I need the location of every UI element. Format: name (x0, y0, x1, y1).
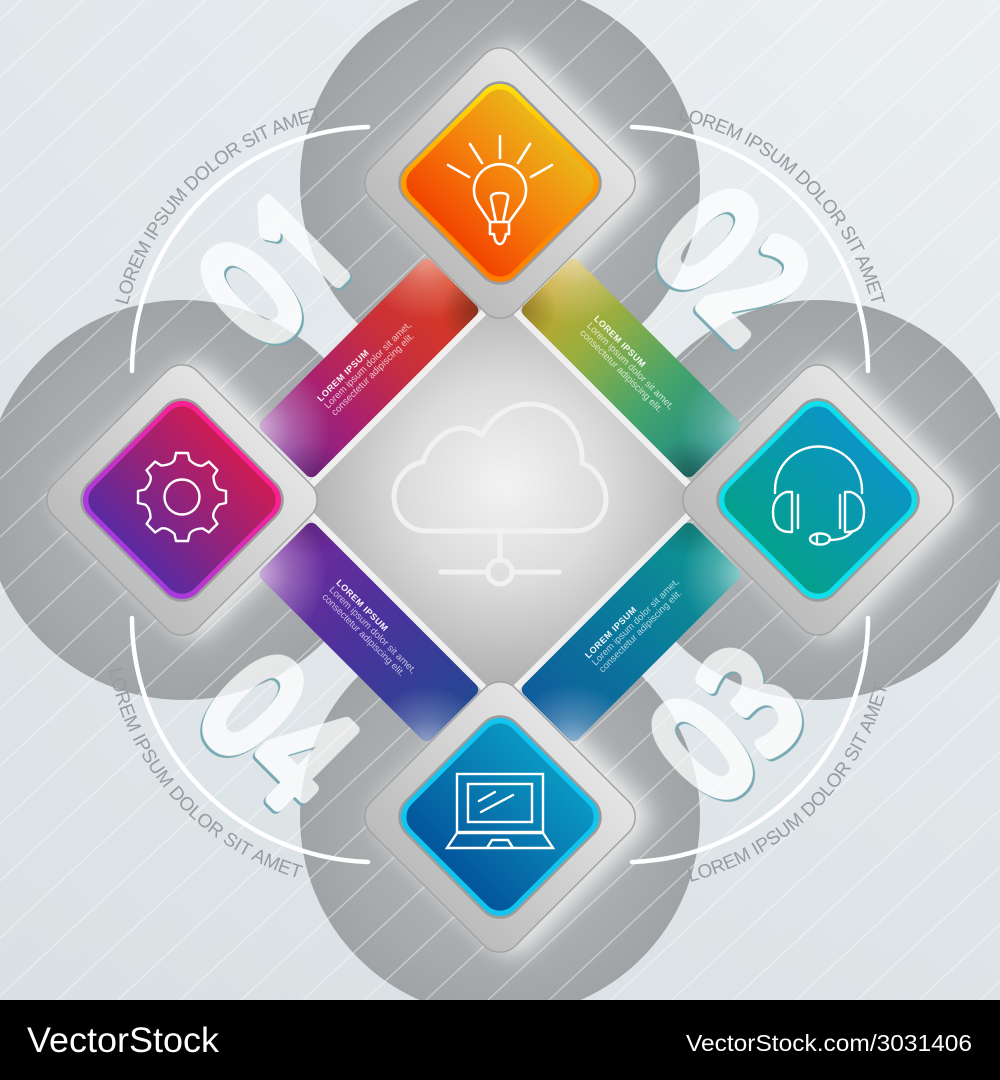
curved captions: LOREM IPSUM DOLOR SIT AMET (115, 107, 320, 304)
ribbon text: Lorem ipsum dolor sit amet, (327, 585, 418, 676)
panel: top tile (356, 39, 644, 327)
panel: ribbon green (522, 258, 740, 478)
ribbon text: LOREM IPSUM (334, 578, 390, 633)
footer url: VectorStock.com/3031406 (686, 1030, 972, 1056)
ribbon text: consectetur adipiscing elit. (320, 592, 407, 679)
icon: laptop (447, 774, 553, 848)
panel: left tile (38, 356, 326, 644)
icon: headset (773, 446, 864, 544)
tile glows (47, 36, 977, 964)
ribbon text: consectetur adipiscing elit. (329, 331, 417, 418)
icon: gear (132, 447, 232, 547)
icon: cloud network (394, 404, 606, 584)
footer bar (0, 1000, 1000, 1080)
ribbon text: LOREM IPSUM (315, 347, 371, 403)
panel: ribbon blue (260, 522, 478, 742)
ribbon text: Lorem ipsum dolor sit amet, (584, 321, 676, 412)
curved captions: LOREM IPSUM DOLOR SIT AMET (110, 668, 304, 878)
ribbon text: Lorem ipsum dolor sit amet, (590, 577, 681, 668)
panel: bottom tile (356, 673, 644, 961)
curved captions (110, 107, 886, 882)
ribbon text: consectetur adipiscing elit. (597, 588, 684, 675)
footer logo: VectorStock (27, 1021, 220, 1060)
panel: ribbon red (260, 258, 478, 478)
ribbon text: LOREM IPSUM (592, 314, 648, 369)
white corner arcs (132, 127, 868, 862)
ribbon text: Lorem ipsum dolor sit amet, (322, 320, 414, 411)
curved captions: LOREM IPSUM DOLOR SIT AMET (688, 682, 886, 882)
panel: ribbon teal (522, 522, 740, 742)
number 01: 01 (178, 170, 380, 372)
ribbon text: LOREM IPSUM (583, 604, 639, 660)
number 03: 03 (629, 626, 831, 828)
panel: right tile (674, 356, 962, 644)
number 02: 02 (629, 166, 831, 368)
ribbon text: consectetur adipiscing elit. (577, 328, 665, 415)
curved captions: LOREM IPSUM DOLOR SIT AMET (679, 108, 886, 302)
panel: center diamond (296, 296, 704, 704)
icon: lightbulb (448, 136, 552, 244)
number 04: 04 (174, 632, 376, 834)
